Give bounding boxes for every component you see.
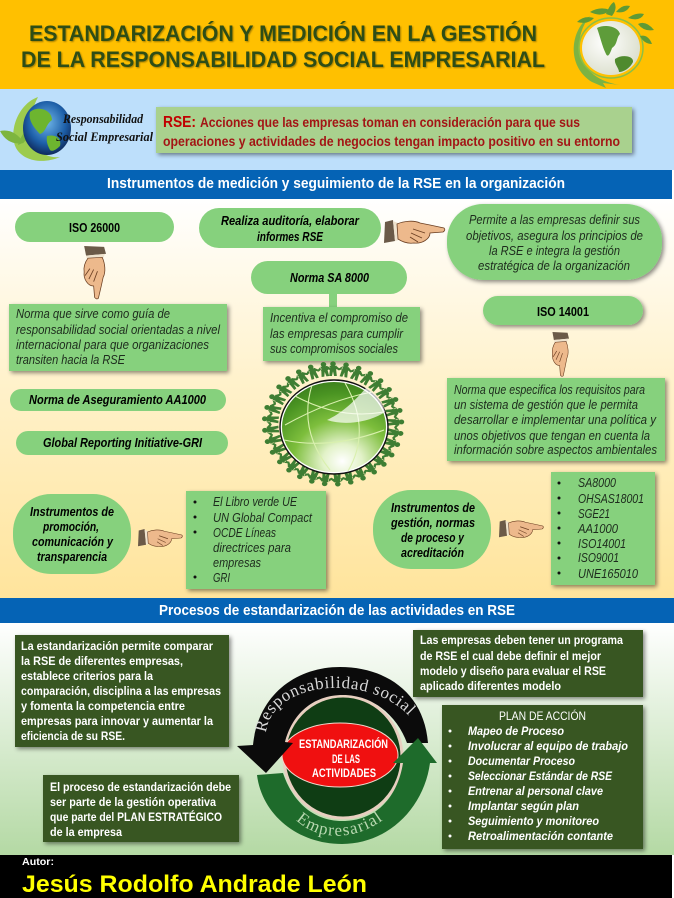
red center ellipse <box>282 723 398 787</box>
red center ellipse: ESTANDARIZACIÓN <box>299 736 388 751</box>
pill: promocion: Instrumentos de <box>30 505 114 519</box>
footer: author: Autor: <box>22 857 54 868</box>
pill: Norma SA 8000 <box>251 261 407 294</box>
pill: auditoria <box>199 208 381 248</box>
pill: promocion <box>13 494 131 574</box>
text box: SA 8000 description: Incentiva el compromiso de <box>270 311 408 325</box>
icon: blue globe with Responsabilidad Social Empresarial lettering: Social Empresarial <box>56 129 153 144</box>
pill: gestion: gestión, normas <box>390 516 475 530</box>
text box: plan de accion: Entrenar al personal clave <box>468 784 603 798</box>
green arrow <box>257 738 437 844</box>
list: promocion instruments: UN Global Compact <box>213 511 312 525</box>
text box: estandarizacion permite: comparación, disciplina a las empresas <box>21 684 221 698</box>
text box: ISO 26000 description: responsabilidad social orientadas a nivel <box>16 323 221 337</box>
footer: author <box>0 855 672 898</box>
panel: promocion <box>13 491 326 589</box>
list: gestion standards: UNE165010 <box>578 567 638 581</box>
text box: ISO 26000 description: transiten hacia la RSE <box>16 353 126 367</box>
list: gestion standards: SGE21 <box>578 507 610 521</box>
black arrow <box>237 667 428 773</box>
title: DE LA RESPONSABILIDAD SOCIAL EMPRESARIAL <box>21 47 545 72</box>
pill: promocion: transparencia <box>37 550 107 564</box>
pill: gestion: acreditación <box>401 546 464 560</box>
list: gestion standards: ISO9001 <box>578 551 619 565</box>
text box: proceso de estandarizacion: de la empresa <box>50 825 122 839</box>
text box: programa de RSE: de RSE el cual debe definir el mejor <box>420 649 601 663</box>
list: gestion standards: SA8000 <box>578 476 616 490</box>
panel: auditoria <box>199 204 662 280</box>
pill: promocion: promoción, <box>42 520 99 534</box>
icon: pointing hand down <box>84 246 106 299</box>
callout: RSE definition: RSE: <box>163 114 196 131</box>
dark green ellipse <box>284 696 402 818</box>
callout: RSE definition: operaciones y actividades de negocios tengan impacto positivo en su entorno <box>163 134 620 149</box>
text box: SA 8000 description: las empresas para cumplir <box>270 327 404 341</box>
list: gestion standards: AA1000 <box>577 522 618 536</box>
pill: objetivos description: objetivos, asegura los principios de <box>466 229 643 243</box>
text box: plan de accion <box>442 705 643 849</box>
text box: estandarizacion permite: empresas para innovar y aumentar la <box>21 714 213 728</box>
pill: objetivos description: Permite a las empresas definir sus <box>469 213 640 227</box>
callout: RSE definition <box>156 107 632 153</box>
text box: ISO 26000 description: Norma que sirve como guía de <box>16 307 170 321</box>
RSE definition band <box>0 89 674 170</box>
pill: auditoria: Realiza auditoría, elaborar <box>221 214 360 228</box>
footer: author: Jesús Rodolfo Andrade León <box>22 871 367 898</box>
list: promocion instruments: El Libro verde UE <box>213 495 298 509</box>
text box: plan de accion: PLAN DE ACCIÓN <box>499 708 586 723</box>
pill: promocion: comunicación y <box>32 535 114 549</box>
text box: plan de accion: Retroalimentación contante <box>468 829 613 843</box>
text box: plan de accion: Documentar Proceso <box>468 754 575 768</box>
pill: ISO 14001 <box>483 296 643 325</box>
text box: estandarizacion permite: La estandarización permite comparar <box>21 639 213 653</box>
text box: estandarizacion permite: establece criterios para la <box>21 669 153 683</box>
list: promocion instruments: GRI <box>213 571 230 585</box>
text box: plan de accion: Mapeo de Proceso <box>468 724 564 738</box>
text box: programa de RSE <box>413 630 643 697</box>
icon: globe logo with leaves <box>574 2 654 88</box>
list: gestion standards: ISO14001 <box>578 537 626 551</box>
text box: estandarizacion permite: la RSE de diferentes empresas, <box>21 654 183 668</box>
red center ellipse: DE LAS <box>332 752 360 766</box>
pill: ISO 14001: ISO 14001 <box>537 305 589 319</box>
panel: ISO 26000 <box>9 212 227 371</box>
list: promocion instruments <box>186 491 326 589</box>
text box: plan de accion: Implantar según plan <box>468 799 579 813</box>
pill: Norma SA 8000: Norma SA 8000 <box>290 271 369 285</box>
pill: gestion <box>373 490 491 569</box>
pill: ISO 26000: ISO 26000 <box>69 221 120 235</box>
panel: SA 8000 <box>251 261 420 361</box>
text box: ISO 14001 description: información sobre aspectos ambientales <box>454 443 657 457</box>
icon: blue globe with Responsabilidad Social Empresarial lettering: Responsabilidad <box>62 111 143 126</box>
text box: proceso de estandarizacion: que parte del PLAN ESTRATÉGICO <box>50 809 222 824</box>
text box: ISO 14001 description: Norma que especifica los requisitos para <box>454 383 645 397</box>
icon: blue globe with Responsabilidad Social Empresarial lettering <box>0 97 153 161</box>
pill: auditoria: informes RSE <box>257 230 324 244</box>
text box: estandarizacion permite: eficiencia de su RSE. <box>21 729 125 743</box>
pill: objetivos description: la RSE e integra la gestión <box>489 244 620 258</box>
list: gestion standards: OHSAS18001 <box>578 492 644 506</box>
icon: pointing hand right <box>499 520 543 537</box>
pill: gestion: Instrumentos de <box>391 501 475 515</box>
pill: gestion: de proceso y <box>401 531 465 545</box>
pill: GRI: Global Reporting Initiative-GRI <box>43 436 202 450</box>
list: promocion instruments: empresas <box>213 556 261 570</box>
text box: programa de RSE: modelo y diseño para evaluar el RSE <box>420 664 606 678</box>
section heading: procesos <box>0 598 674 623</box>
section heading: instrumentos <box>0 170 672 199</box>
panel: ISO 14001 <box>447 296 665 461</box>
pill: ISO 26000 <box>15 212 174 242</box>
text box: plan de accion: Seleccionar Estándar de RSE <box>468 769 613 783</box>
list: promocion instruments: OCDE Líneas <box>213 526 276 540</box>
text box: proceso de estandarizacion <box>43 775 239 842</box>
icon: green globe with ring of people <box>261 361 405 487</box>
pill: objetivos description <box>447 204 662 280</box>
pill: AA1000 <box>10 389 226 411</box>
section heading: instrumentos: Instrumentos de medición y seguimiento de la RSE en la organización <box>107 175 565 192</box>
text box: ISO 26000 description <box>9 304 227 371</box>
list: gestion standards <box>551 472 655 585</box>
pill: GRI <box>16 431 228 455</box>
icon: pointing hand down <box>552 332 569 376</box>
text box: estandarizacion permite: y fomenta la competencia entre <box>21 699 185 713</box>
pill: objetivos description: estratégica de la organización <box>478 259 630 273</box>
title: ESTANDARIZACIÓN Y MEDICIÓN EN LA GESTIÓN <box>29 21 537 46</box>
icon: pointing hand right <box>384 220 445 243</box>
text box: ISO 26000 description: internacional para que organizaciones <box>16 338 209 352</box>
text box: estandarizacion permite <box>15 635 229 747</box>
text box: SA 8000 description <box>263 307 420 361</box>
section heading: procesos: Procesos de estandarización de las actividades en RSE <box>159 602 515 619</box>
text box: ISO 14001 description <box>447 378 665 461</box>
text box: proceso de estandarizacion: ser parte de la gestión operativa <box>50 795 216 809</box>
ring label: Empresarial: Empresarial <box>296 812 382 838</box>
text box: plan de accion: Seguimiento y monitoreo <box>468 814 599 828</box>
icon: pointing hand right <box>138 529 182 546</box>
text box: programa de RSE: aplicado diferentes modelo <box>420 679 561 693</box>
panel: gestion <box>373 472 655 585</box>
header band <box>0 0 674 89</box>
text box: programa de RSE: Las empresas deben tener un programa <box>420 633 623 647</box>
pill: AA1000: Norma de Aseguramiento AA1000 <box>29 393 206 407</box>
diagram: responsabilidad social empresarial cycle <box>237 667 437 844</box>
callout: RSE definition: Acciones que las empresas toman en consideración para que sus <box>200 115 580 130</box>
list: promocion instruments: directrices para <box>213 541 291 555</box>
text box: ISO 14001 description: desarrollar e implementar una política y <box>454 413 657 427</box>
ring label: Responsabilidad social: Responsabilidad social <box>255 676 416 732</box>
title <box>21 21 545 72</box>
text box: proceso de estandarizacion: El proceso de estandarización debe <box>50 780 231 794</box>
text box: SA 8000 description: sus compromisos sociales <box>270 342 398 356</box>
text box: ISO 14001 description: unos objetivos que tengan en cuenta la <box>454 429 650 443</box>
text box: plan de accion: Involucrar al equipo de trabajo <box>468 739 628 753</box>
red center ellipse: ACTIVIDADES <box>312 766 376 780</box>
text box: ISO 14001 description: un sistema de gestión que le permita <box>454 398 638 412</box>
